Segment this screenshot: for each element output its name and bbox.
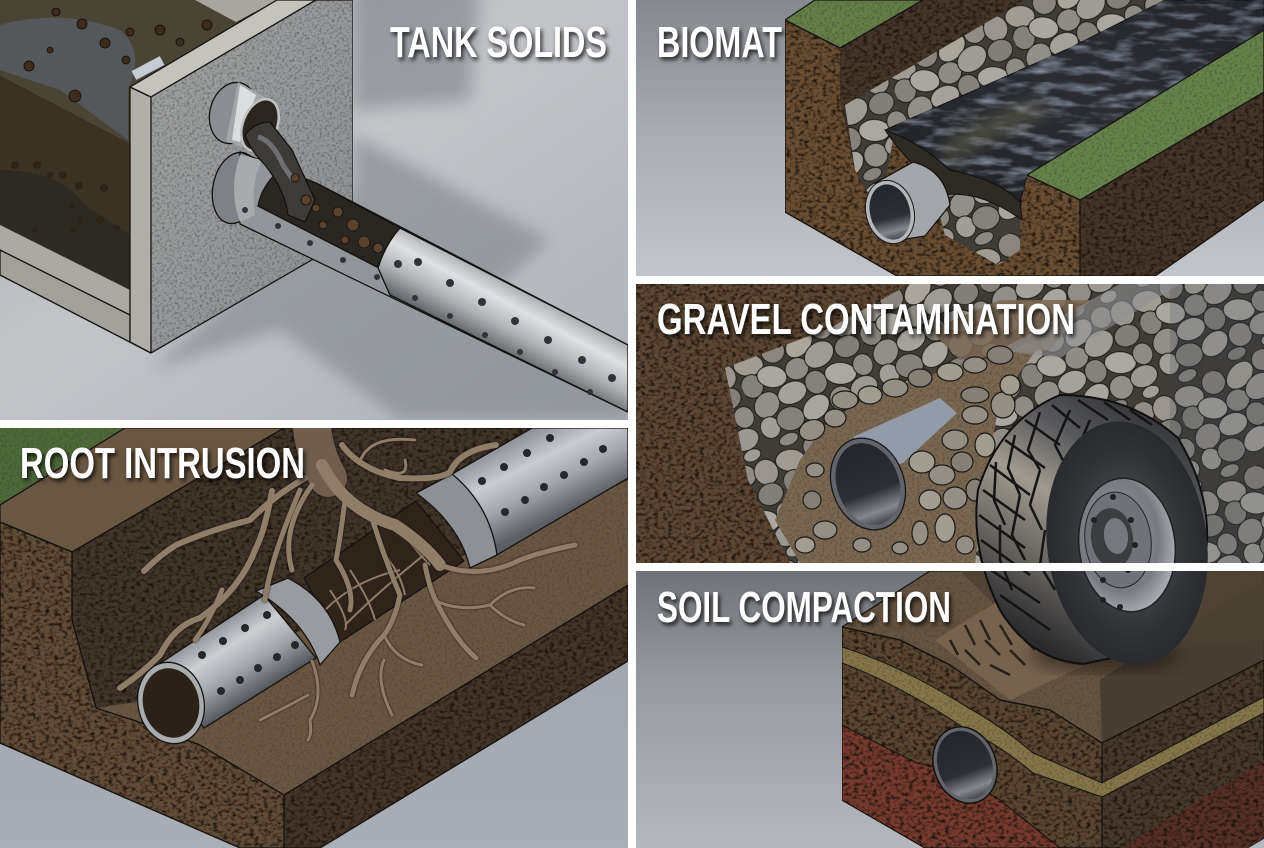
tire <box>976 395 1221 674</box>
soil right face <box>1080 92 1264 276</box>
background: soil compaction <box>636 571 1264 848</box>
tire <box>975 394 1208 563</box>
darker far soil <box>1100 640 1264 742</box>
far pipe section <box>416 428 628 568</box>
trench back wall <box>840 0 1030 170</box>
soil block front left <box>785 20 1080 276</box>
panel: biomat <box>636 0 1264 276</box>
yellow soil layer <box>842 647 1264 797</box>
tree roots <box>120 428 575 740</box>
gravel bed lower <box>940 194 1020 265</box>
tire ruts <box>935 600 1085 700</box>
tire shadow <box>1030 638 1180 672</box>
upper silt streak <box>930 300 1090 360</box>
heading: gravel contamination: GRAVEL CONTAMINATION <box>657 295 1075 344</box>
background: tank solids <box>0 0 628 420</box>
loose stones on silt <box>795 346 1020 554</box>
upper soil surface <box>0 428 284 552</box>
buried pipe <box>830 398 957 530</box>
near pipe section <box>130 578 340 750</box>
root-filled cutaway <box>304 501 464 642</box>
soil front face <box>842 627 1102 848</box>
soil floor <box>96 480 628 795</box>
panel: soil compaction <box>636 571 1264 848</box>
compressed pipe <box>923 718 1007 812</box>
heading: root intrusion: ROOT INTRUSION <box>20 439 305 488</box>
biomat sludge streak <box>940 100 1050 165</box>
soil right face <box>284 585 628 848</box>
panel: root intrusion <box>0 428 628 848</box>
gravel bed upper <box>845 0 1165 200</box>
gravel bed <box>725 284 1264 563</box>
soil left face <box>0 522 284 848</box>
biomat water surface <box>885 0 1264 202</box>
panel: tank solids <box>0 0 628 420</box>
wall and pipe shadow <box>150 0 628 420</box>
right grass strip <box>1027 30 1264 200</box>
background: root intrusion <box>0 428 628 848</box>
grass patch <box>0 428 130 505</box>
concrete wall <box>130 0 353 353</box>
soil right face <box>1102 660 1264 848</box>
silty ground around pipe <box>775 345 1040 563</box>
panel: gravel contamination <box>636 284 1264 563</box>
tank interior <box>0 0 277 353</box>
left grass strip <box>785 0 923 48</box>
outlet pipe <box>859 162 950 249</box>
red clay layer <box>842 725 1060 848</box>
compacted soil top <box>842 571 1264 743</box>
perforated lower pipe with cutaway <box>206 122 628 412</box>
biomat cut edge <box>885 130 1022 220</box>
cool shade on right gravel <box>1170 284 1264 563</box>
background: biomat <box>636 0 1264 276</box>
trench back wall <box>72 428 628 745</box>
soil background <box>636 284 910 563</box>
heading: tank solids: TANK SOLIDS <box>390 18 607 67</box>
heading: soil compaction: SOIL COMPACTION <box>657 583 951 632</box>
upper inlet pipe with sludge <box>208 82 280 152</box>
heading: biomat: BIOMAT <box>657 18 782 67</box>
